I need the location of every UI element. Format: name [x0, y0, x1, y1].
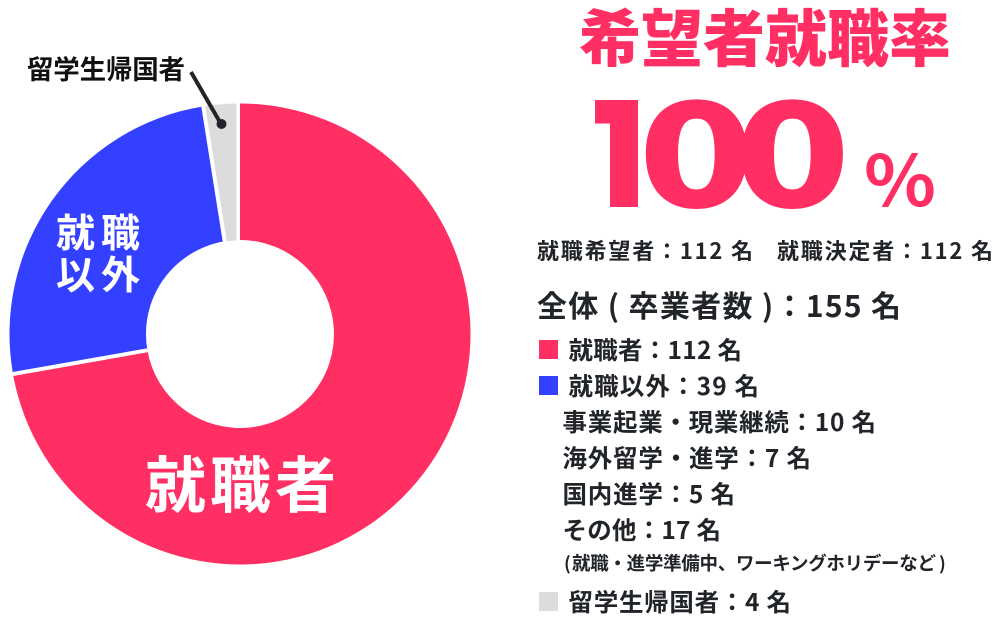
breakdown list: 海外留学・進学：7 名: [562, 440, 811, 475]
breakdown list: (: [564, 550, 571, 576]
stats: 就職決定者: 就職決定者：112 名: [777, 234, 993, 266]
legend: 留学生帰国者: 留学生帰国者：4 名: [568, 584, 791, 619]
segment: 留学生帰国者: [203, 104, 236, 241]
segment: 就職以外: [9, 106, 225, 374]
big number: 100%: 0: [638, 42, 755, 248]
breakdown list: その他：17 名: [562, 512, 721, 547]
callout: 留学生帰国者: 留学生帰国者: [27, 48, 185, 87]
stats: 全体: 全体 ( 卒業者数 )：155 名: [537, 282, 901, 326]
breakdown list: ): [939, 550, 946, 576]
big number: 100%: 1: [590, 42, 676, 248]
breakdown list: 事業起業・現業継続：10 名: [562, 404, 876, 439]
donut chart: [9, 102, 471, 564]
breakdown list: [562, 404, 946, 576]
big number: 100%: [595, 99, 934, 209]
big number: 100%: 0: [734, 42, 851, 248]
legend: 就職以外: 就職以外：39 名: [568, 368, 759, 403]
stats: 就職希望者: 就職希望者：112 名: [537, 234, 753, 266]
segment: 就職者: [13, 104, 471, 564]
label: 就職以外: 就職: [56, 203, 140, 259]
label: 就職者: 就職者: [145, 436, 336, 525]
label: 就職以外: [56, 203, 140, 301]
legend: 就職者: 就職者：112 名: [568, 332, 742, 367]
callout: 留学生帰国者: [27, 48, 226, 129]
big number: 100%: %: [864, 126, 936, 227]
breakdown list: 国内進学：5 名: [562, 476, 735, 511]
breakdown list: 就職・進学準備中、ワーキングホリデーなど: [572, 550, 936, 576]
legend: [539, 332, 946, 619]
label: 就職以外: 以外: [56, 245, 140, 301]
